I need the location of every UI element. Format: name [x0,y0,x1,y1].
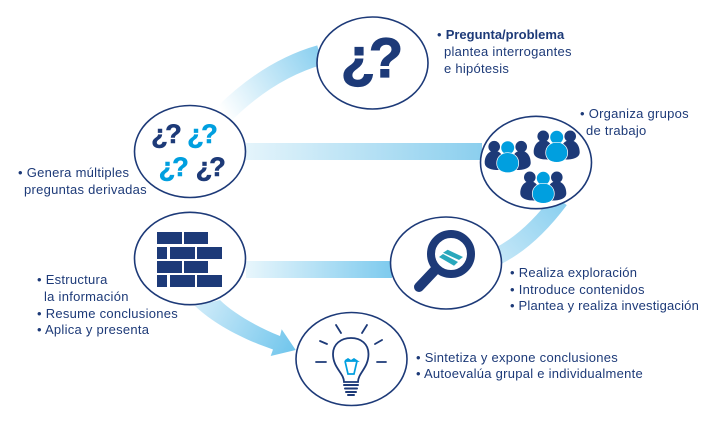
icon: single question circle: ¿ [341,26,375,89]
text: question / problem: • Pregunta/problema [437,27,564,42]
icon: work groups circle [480,116,592,209]
icon: group of people 2 [534,130,580,162]
icon: multiple questions circle: ¿ [159,152,175,182]
text: question / problem: e hipótesis [444,61,509,76]
text: organize groups: • Organiza grupos [580,106,689,121]
text: organize groups: de trabajo [586,123,647,138]
arrow: multiple questions to question [224,55,320,114]
arrow: groups to magnifier [498,200,560,256]
text: structure information: la información [44,289,129,304]
text: structure information: • Estructura [37,272,108,287]
text: multiple questions: • Genera múltiples [18,165,129,180]
text: exploration: • Plantea y realiza investigación [510,298,699,313]
arrow: multiple questions to groups [246,143,482,160]
icon: single question circle: ? [369,26,403,89]
icon: multiple questions circle: ? [172,152,189,182]
icon: brick wall circle [134,212,246,305]
text: structure information: • Resume conclusiones [37,306,178,321]
icon: light bulb circle [296,312,407,406]
text: question / problem: plantea interrogantes [444,44,572,59]
text: structure information: • Aplica y presenta [37,322,150,337]
icon: multiple questions circle: ¿ [187,119,204,149]
text: synthesis: • Sintetiza y expone conclusiones [416,350,618,365]
icon: multiple questions circle: ? [209,152,226,182]
icon: single question circle [317,17,428,109]
text: exploration: • Realiza exploración [510,265,637,280]
arrow: bricks to magnifier [246,261,392,278]
icon: multiple questions circle [134,106,246,198]
icon: multiple questions circle: ? [165,119,182,149]
icon: multiple questions circle: ¿ [151,119,168,149]
text: multiple questions: preguntas derivadas [24,182,147,197]
icon: magnifier circle [390,217,502,309]
icon: group of people 1 [485,141,531,173]
icon: multiple questions circle: ? [201,119,218,149]
arrow: bricks to bulb [195,300,296,356]
icon: group of people 3 [520,172,566,203]
text: synthesis: • Autoevalúa grupal e individualmente [416,366,643,381]
icon: multiple questions circle: ¿ [196,152,212,182]
text: exploration: • Introduce contenidos [510,282,645,297]
